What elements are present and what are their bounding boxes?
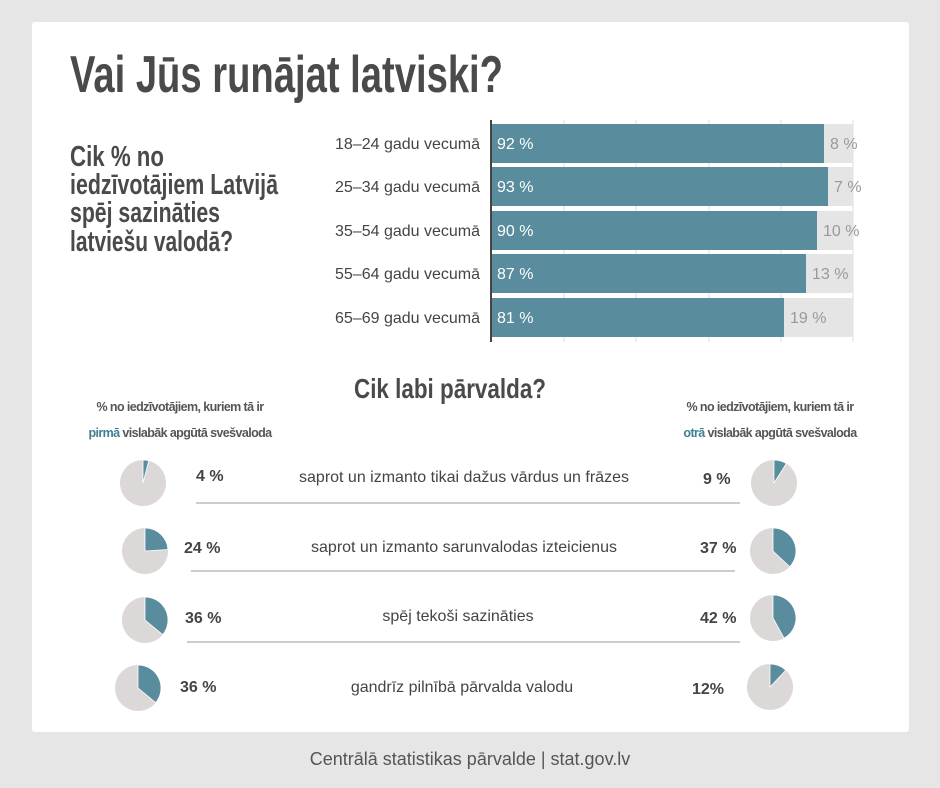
subtitle question: latviešu valodā? — [70, 226, 233, 258]
legend right: otrā vislabāk apgūtā svešvaloda — [683, 426, 858, 440]
bar chart: age groups: 7 % — [834, 179, 862, 196]
bar chart: age groups: 92 % — [497, 136, 533, 153]
bar chart: age groups: 10 % — [823, 223, 859, 240]
bar chart: age groups: 93 % — [497, 179, 533, 196]
pies right — [747, 460, 797, 710]
footer: Centrālā statistikas pārvalde | stat.gov.lv — [310, 749, 630, 769]
legend left — [88, 400, 273, 440]
bar chart: age groups: 90 % — [497, 223, 533, 240]
category labels — [299, 469, 629, 696]
bar chart: age groups: 25–34 gadu vecumā — [335, 179, 480, 196]
category labels: spēj tekoši sazināties — [382, 608, 534, 625]
bar chart: age groups: 13 % — [812, 266, 848, 283]
legend left: % no iedzīvotājiem, kuriem tā ir — [97, 400, 264, 414]
left values: 36 % — [180, 679, 216, 696]
legend right — [683, 400, 858, 440]
bar chart: age groups: 55–64 gadu vecumā — [335, 266, 480, 283]
category labels: saprot un izmanto sarunvalodas izteicienus — [311, 539, 617, 556]
subtitle question — [70, 141, 279, 258]
bar chart: age groups: 81 % — [497, 310, 533, 327]
separators — [187, 503, 740, 642]
right values: 37 % — [700, 540, 736, 557]
left values: 4 % — [196, 468, 224, 485]
bar chart: age groups: 8 % — [830, 136, 858, 153]
left values: 24 % — [184, 540, 220, 557]
left values: 36 % — [185, 610, 221, 627]
category labels: saprot un izmanto tikai dažus vārdus un frāzes — [299, 469, 629, 486]
bar chart: age groups — [335, 120, 862, 342]
pies left — [115, 460, 168, 711]
category labels: gandrīz pilnībā pārvalda valodu — [351, 679, 573, 696]
bar chart: age groups: 19 % — [790, 310, 826, 327]
right values: 9 % — [703, 471, 731, 488]
subtitle question: spēj sazināties — [70, 197, 220, 229]
right values — [692, 471, 736, 698]
subtitle question: Cik % no — [70, 141, 164, 173]
bar chart: age groups: 87 % — [497, 266, 533, 283]
title: Vai Jūs runājat latviski? — [70, 46, 503, 104]
bar chart: age groups: 65–69 gadu vecumā — [335, 310, 480, 327]
right values: 42 % — [700, 610, 736, 627]
subtitle question: iedzīvotājiem Latvijā — [70, 169, 279, 201]
legend left: pirmā vislabāk apgūtā svešvaloda — [88, 426, 273, 440]
legend right: % no iedzīvotājiem, kuriem tā ir — [687, 400, 854, 414]
heading: proficiency: Cik labi pārvalda? — [354, 373, 546, 404]
bar chart: age groups: 18–24 gadu vecumā — [335, 136, 480, 153]
right values: 12% — [692, 681, 724, 698]
left values — [180, 468, 224, 696]
bar chart: age groups: 35–54 gadu vecumā — [335, 223, 480, 240]
